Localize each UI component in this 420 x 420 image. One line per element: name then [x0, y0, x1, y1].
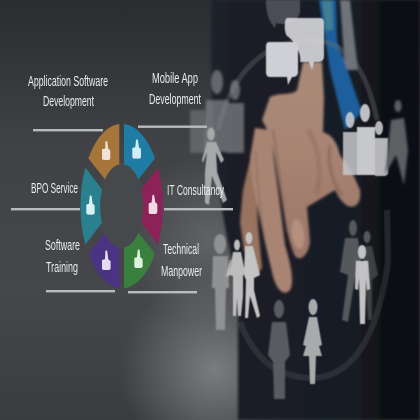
label rules — [11, 126, 233, 293]
segment: orange — [88, 124, 119, 179]
people group, right — [340, 220, 378, 324]
label: Software Training: Training — [46, 260, 78, 276]
segment: green — [124, 233, 155, 288]
label: Application Software Development: Development — [43, 94, 94, 110]
person: bright man — [355, 245, 370, 324]
label: Technical Manpower: Technical — [163, 242, 199, 258]
walking figure, far right — [385, 100, 408, 185]
person: dim man — [268, 300, 290, 399]
ring finger — [250, 128, 292, 293]
segment: purple — [88, 233, 119, 288]
label: BPO Service: BPO Service — [31, 181, 78, 197]
suit shirt and blue tie — [319, 0, 362, 130]
label: Technical Manpower — [161, 242, 202, 280]
dim group icon, upper middle — [190, 70, 244, 153]
people group, bottom — [268, 299, 322, 399]
label: Mobile App Development: Development — [149, 92, 201, 108]
label: Application Software Development: Application Software — [28, 74, 108, 90]
group of three people icon, right — [343, 104, 388, 176]
pinky finger — [240, 160, 262, 276]
finger shadows — [273, 130, 287, 232]
orbit ring around the hand — [218, 40, 388, 378]
icon: thumb teal — [86, 195, 95, 215]
bubble: dim rear — [266, 0, 300, 28]
middle fingernail — [290, 218, 306, 250]
label: IT Consultancy: IT Consultancy — [167, 183, 224, 199]
label: Software Training — [45, 238, 80, 276]
label: Technical Manpower: Manpower — [161, 264, 202, 280]
person: man — [244, 232, 260, 318]
service wheel — [80, 124, 163, 288]
hand pointing — [240, 62, 360, 293]
icon: thumb orange — [102, 141, 110, 160]
icon: thumb purple — [102, 250, 111, 270]
icon: thumb green — [134, 249, 143, 268]
speech bubbles — [266, 0, 324, 85]
label: Software Training: Software — [45, 238, 80, 254]
person: woman — [226, 240, 245, 316]
segment: magenta — [141, 167, 163, 245]
wheel centre — [98, 163, 145, 249]
segment: teal — [80, 167, 102, 245]
thumb icons — [86, 139, 157, 270]
bubble: upper — [285, 18, 324, 70]
person: woman — [303, 299, 322, 384]
bubble: left — [266, 42, 298, 85]
person: blurred pale — [212, 234, 229, 330]
labels — [28, 71, 224, 280]
people group, lower middle — [212, 232, 260, 330]
walking figure by IT Consultancy — [202, 128, 227, 205]
icon: thumb magenta — [149, 195, 157, 214]
palm and index finger — [262, 62, 360, 258]
person: dim back pair — [340, 220, 378, 322]
label: Mobile App Development — [149, 71, 201, 108]
label: Mobile App Development: Mobile App — [152, 71, 198, 87]
label: Application Software Development — [28, 74, 108, 110]
segment: blue — [124, 124, 155, 179]
icon: thumb blue — [132, 139, 141, 159]
